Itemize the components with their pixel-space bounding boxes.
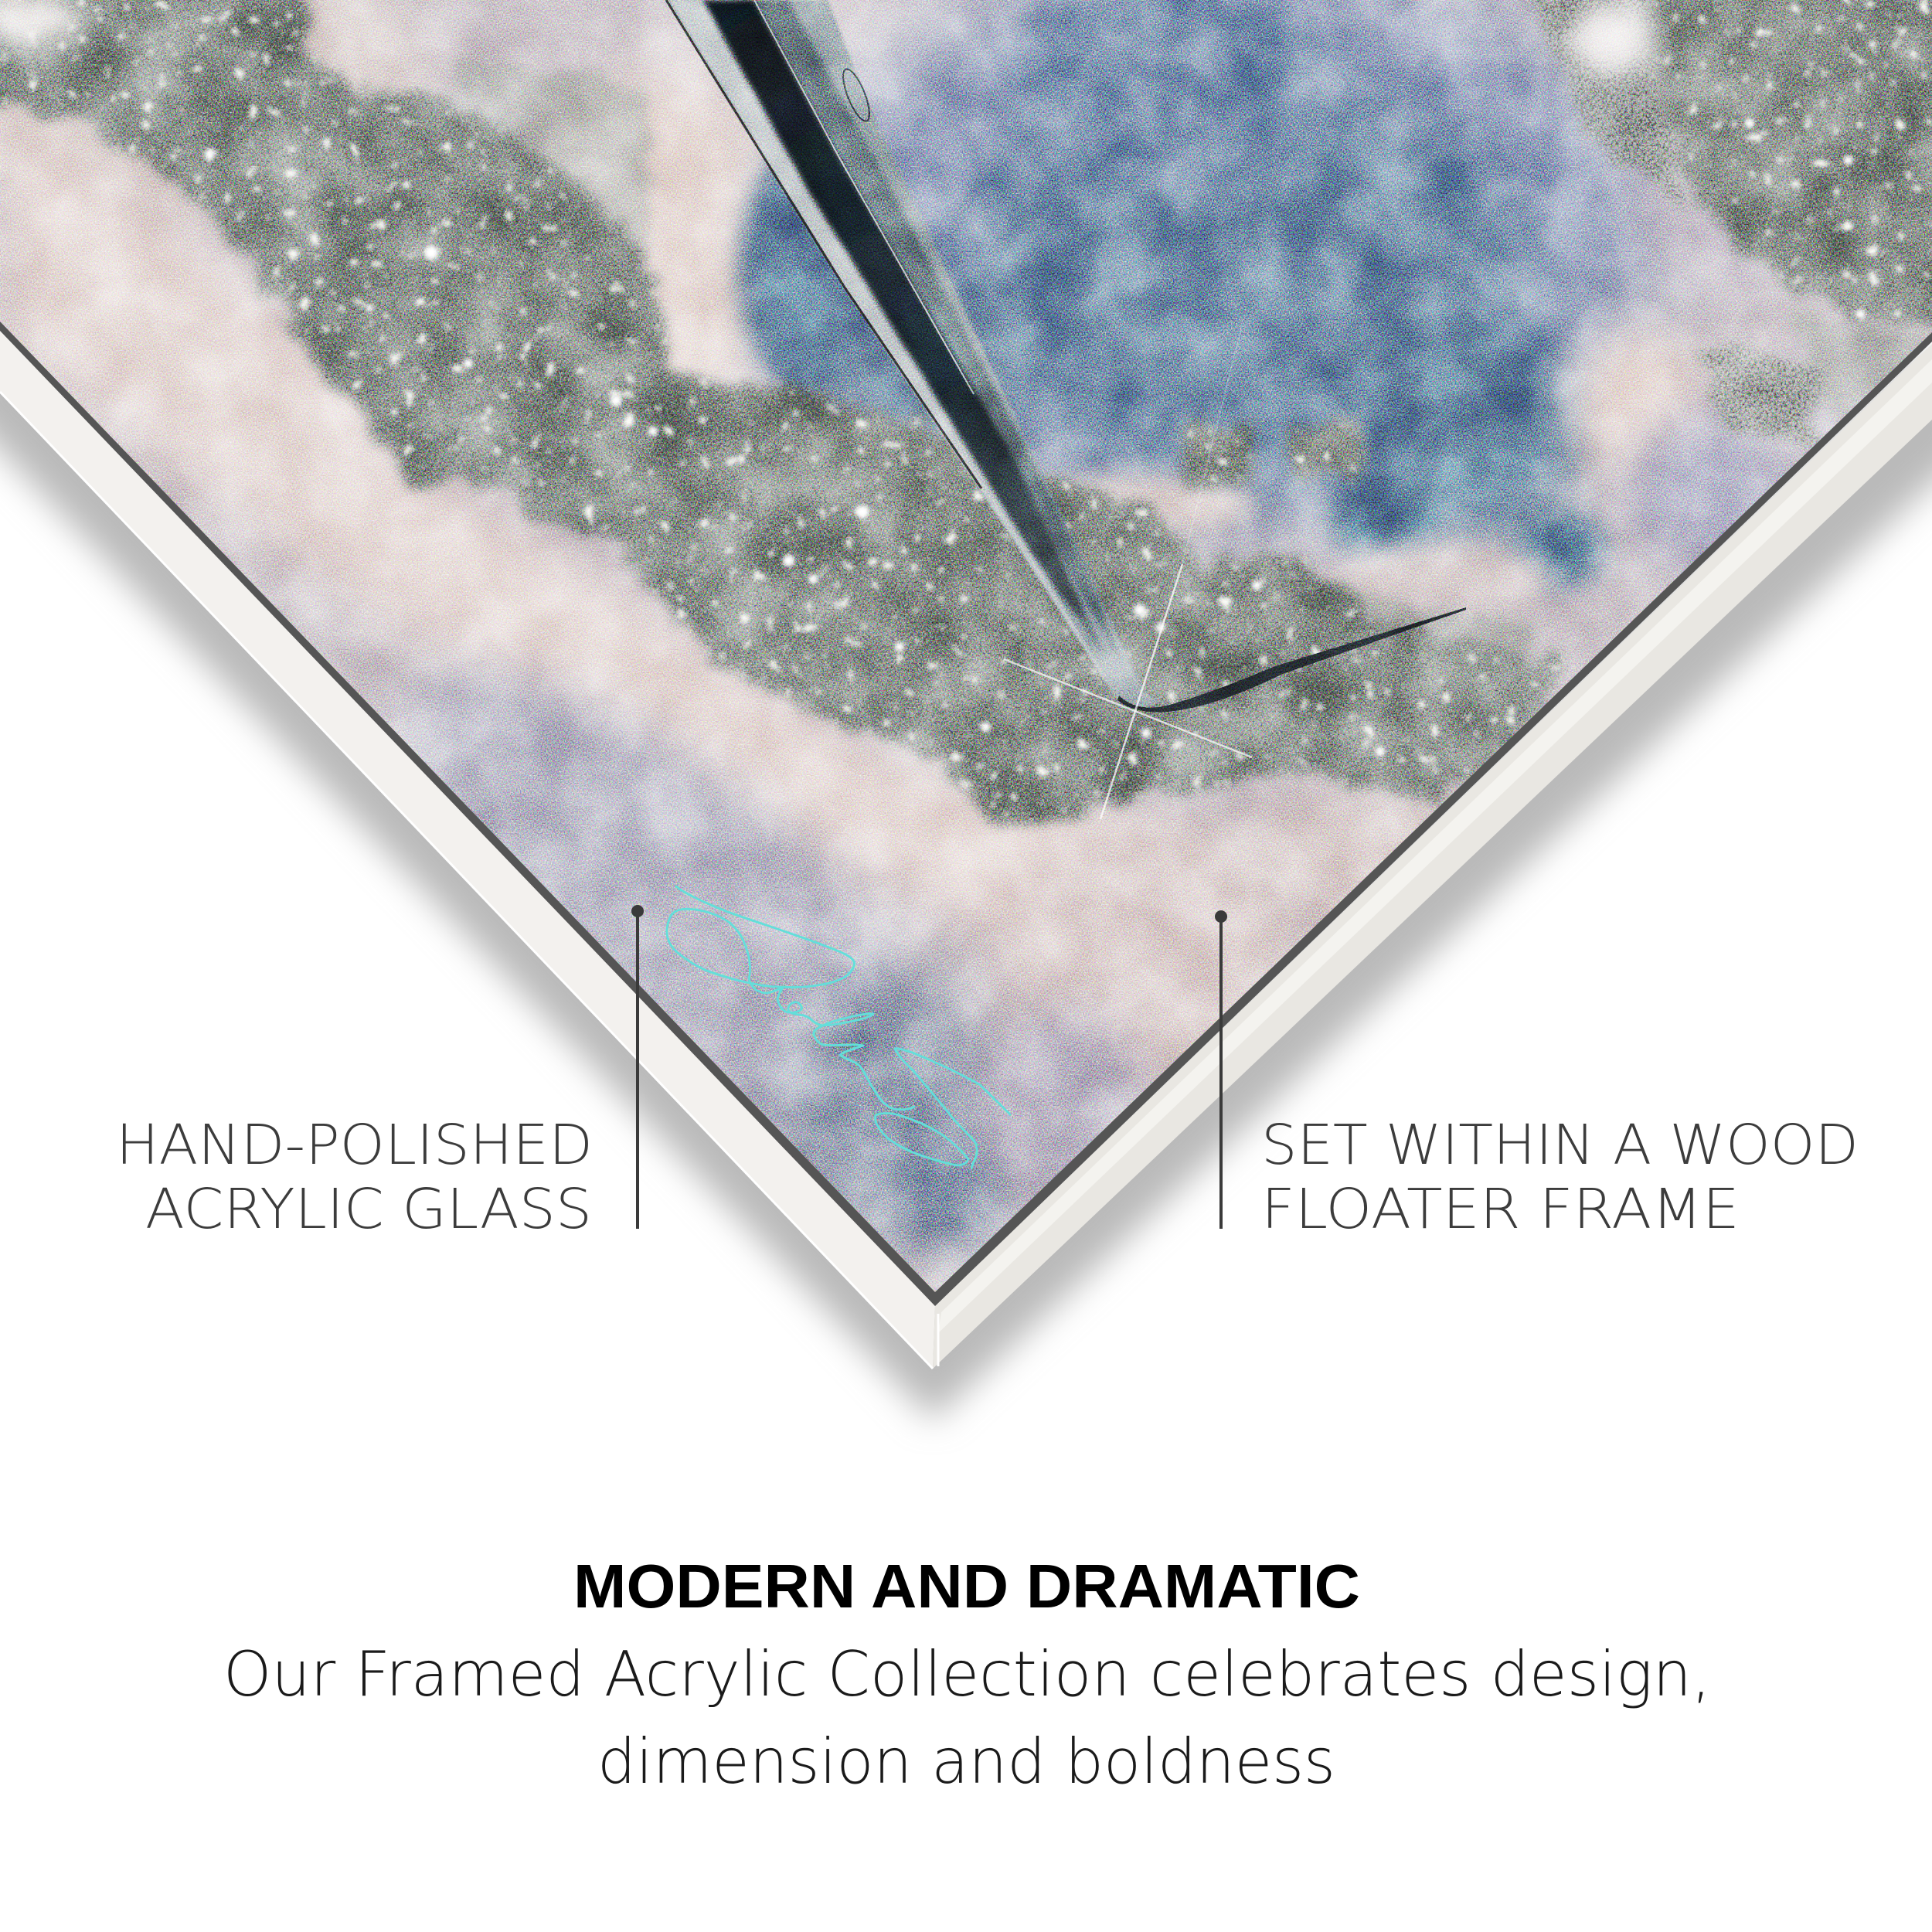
artist signature bbox=[667, 886, 1010, 1168]
callout text: FLOATER FRAME bbox=[1261, 1177, 1740, 1241]
star flare bbox=[1004, 325, 1252, 819]
tweezers inner shaded band bbox=[754, 0, 1122, 665]
tweezers edge line bbox=[666, 0, 981, 488]
caption body: dimension and boldness bbox=[597, 1726, 1335, 1798]
caption body: Our Framed Acrylic Collection celebrates design, bbox=[223, 1638, 1711, 1710]
callout text bbox=[1261, 1113, 1859, 1241]
tweezers highlight ridge bbox=[754, 0, 974, 394]
tweezers dark band bbox=[703, 0, 1105, 657]
tweezers bent tip bbox=[1117, 607, 1466, 712]
pale glow top right bbox=[1567, 2, 1654, 77]
glitter turbulence sparkles bbox=[0, 0, 1932, 819]
callout: hand-polished acrylic glass bbox=[116, 905, 644, 1241]
glitter soft fringe bbox=[444, 0, 1932, 740]
callout dot and leader line bbox=[1215, 910, 1227, 1229]
callout text: ACRYLIC GLASS bbox=[145, 1177, 592, 1241]
colour mottling bbox=[0, 0, 1932, 1314]
frame right face bbox=[933, 344, 1932, 1369]
dark gap between glass and frame bbox=[0, 321, 1932, 1306]
frame outer edge highlight bbox=[0, 392, 933, 1369]
frame drop shadow bbox=[0, 325, 1932, 1420]
caption heading: MODERN AND DRAMATIC bbox=[573, 1552, 1360, 1621]
tweezers bbox=[666, 0, 1466, 712]
painting on acrylic glass bbox=[0, 0, 1932, 1314]
callout text: SET WITHIN A WOOD bbox=[1261, 1113, 1859, 1177]
film grain bbox=[0, 0, 1932, 1314]
glitter band bbox=[0, 0, 1932, 819]
frame mitre joint bbox=[937, 1314, 940, 1366]
tweezers oval mark bbox=[838, 66, 875, 124]
frame right highlight bbox=[938, 359, 1932, 1333]
pale glow top left bbox=[0, 0, 80, 46]
caption body bbox=[223, 1638, 1711, 1798]
callout text: HAND-POLISHED bbox=[116, 1113, 593, 1177]
white floater frame bbox=[0, 321, 1932, 1369]
tweezers silver stripe bbox=[669, 0, 1117, 699]
glitter fine specks bbox=[0, 0, 1932, 819]
callout: wood floater frame bbox=[1215, 910, 1859, 1241]
glitter sparkles bbox=[205, 118, 1866, 757]
glitter core bbox=[0, 0, 1932, 819]
cloud colour masses bbox=[0, 0, 1932, 1250]
callout text bbox=[116, 1113, 593, 1241]
callout dot and leader line bbox=[631, 905, 644, 1229]
